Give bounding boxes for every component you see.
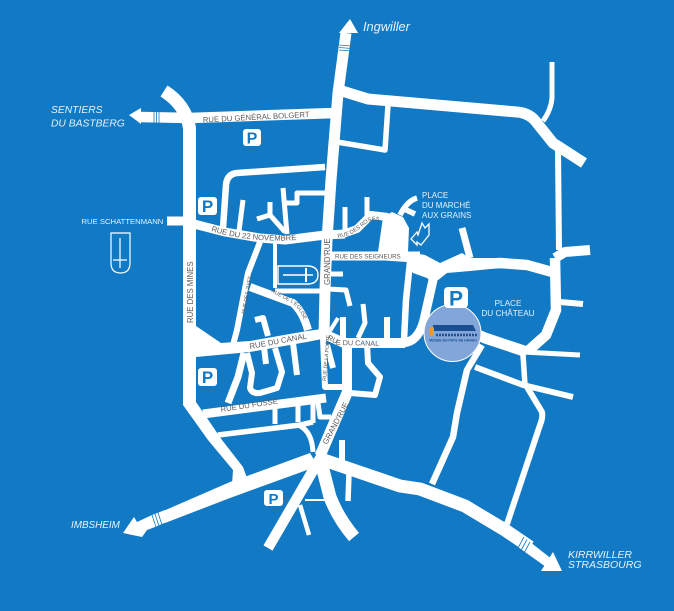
road: stub east [560,302,583,304]
heading: Kirrwiller Strasbourg: STRASBOURG [568,559,642,571]
road: southeast main [318,458,530,547]
road: Fossé east [318,403,331,417]
road: Rue des Seigneurs [330,252,420,260]
icon: parking canal [198,368,217,387]
museum name: MUSEE DU PAYS DE HANAU [429,338,477,342]
road: southwest main [161,453,318,523]
road: side street [283,188,287,234]
road: east side streets [328,274,350,306]
road: Rue des Roses [340,215,388,235]
museum windows band [436,334,477,336]
road: fan east stub [348,473,349,501]
label: Rue du Canal west: RUE DU CANAL [249,331,308,351]
road: lower curve [300,426,313,452]
road: south link [507,387,542,524]
road: loop [247,348,282,393]
road: short dead ends [264,343,297,375]
road: west hook [255,318,268,336]
road: south of market [404,262,410,340]
road: Grand'Rue diagonal [320,393,347,456]
road: fan right [320,458,354,537]
icon: parking north [243,129,261,148]
road: north-east branch [543,62,552,121]
road: market forks [400,198,417,215]
road: Rue des Mines diagonal [183,395,247,484]
label: Rue des Mines: RUE DES MINES [186,261,195,323]
road: Rue du Canal east [322,333,405,343]
icon: parking north: P [247,130,258,148]
label: Grand'Rue south: GRAND'RUE [321,401,351,446]
road: east curve [350,343,380,395]
icon: parking west [198,197,217,216]
icon: parking south [264,490,283,508]
label: Grand'Rue north: GRAND'RUE [323,238,332,285]
road: northern road to the east [342,91,584,163]
label: Rue du 22 Novembre: RUE DU 22 NOVEMBRE [212,226,296,241]
road: short stub [339,440,345,463]
heading: Sentiers du Bastberg: DU BASTBERG [51,118,125,130]
label: Rue du Fossé: RUE DU FOSSE [220,397,278,414]
road: lower parallel [218,422,313,435]
road network [141,33,590,548]
museum roof band [433,325,476,331]
heading: Ingwiller: Ingwiller [363,19,411,34]
road: eastern stub [523,352,580,355]
label: Place du Marché aux Grains: DU MARCHÉ [422,201,470,210]
road: southeast block [475,367,573,397]
road: curved side street [358,304,365,338]
road: east avenue [470,263,552,272]
label: Rue des Roses: RUE DES ROSES [338,216,380,238]
arrow: Sentiers du Bastberg [129,108,159,124]
label: Rue de l'Église: RUE DE L'ÉGLISE [271,289,308,320]
road: short link [330,318,338,331]
road: upper loop [223,167,325,228]
place du marché blob [378,212,500,284]
arrow: Ingwiller [339,19,358,51]
road: east connector south [523,355,525,385]
label: Rue de la Poste: RUE DE LA POSTE [322,334,332,381]
heading: Kirrwiller Strasbourg: KIRRWILLER [568,549,632,561]
road: church south street [275,288,322,294]
road: east exit [555,250,590,258]
museum circle [424,304,481,362]
icon: parking château [444,287,468,310]
arrow: Imbsheim [123,510,169,537]
road: branch at market [462,228,470,258]
icon: church [278,266,318,284]
road: Rue du 22 Novembre [194,224,345,240]
icon: parking south: P [268,491,279,508]
road: Rue du Fossé [203,398,326,414]
label: Rue du Canal east: RUE DU CANAL [328,334,379,346]
road: Grand'Rue south [342,342,352,395]
road: avenue across the museum [432,315,527,352]
label: Rue du Général Bolgert: RUE DU GÉNÉRAL BOLGERT [203,110,310,124]
road: to the canal [400,280,433,343]
road: east side streets [343,317,387,340]
road: Fossé side streets [275,402,313,424]
label: Rue des Seigneurs: RUE DES SEIGNEURS [335,254,401,260]
road: Grand'Rue north [324,33,346,336]
road: west connector [228,353,244,403]
road: forked side street [257,202,285,232]
road: Rue Schattenmann stub [167,216,190,226]
road: side stubs of Rue des Roses [345,197,367,231]
road: short street south [327,345,333,368]
heading: Sentiers du Bastberg: SENTIERS [51,105,103,116]
label: Place du Marché aux Grains: AUX GRAINS [422,211,471,220]
road: Rue du Canal west [196,326,322,357]
arrow: Kirrwiller Strasbourg [518,537,562,571]
icon: parking west: P [202,197,213,216]
road: Rue du Général Bolgert [141,113,335,118]
road: side street [239,200,243,231]
road: Rue de l'Église [250,287,308,330]
icon: cemetery shield [111,233,130,273]
road: Rue de la Poste [323,338,347,387]
label: Place du Château: DU CHÂTEAU [481,308,535,318]
road: Rue des Mines [164,91,190,403]
road: fan middle [300,505,309,535]
road: small square north [337,105,388,150]
road: south link west [432,345,482,484]
road: Rue des Juifs [233,242,260,345]
heading: Imbsheim: IMBSHEIM [71,520,121,531]
icon: market arrow [411,223,429,245]
icon: parking canal: P [202,368,213,387]
label: Place du Château: PLACE [495,299,522,308]
road: fan left [268,455,322,548]
icon: parking château: P [449,288,463,310]
road: east connector [558,150,559,250]
road: side streets north [286,193,325,203]
road: east loop [528,258,556,351]
road: church street [273,242,277,288]
label: Place du Marché aux Grains: PLACE [422,191,448,200]
road: fan cross bar [305,499,330,501]
label: Rue Schattenmann: RUE SCHATTENMANN [82,217,163,226]
label: Rue des Juifs: RUE DES JUIFS [241,275,254,314]
museum orange tower [430,327,434,336]
